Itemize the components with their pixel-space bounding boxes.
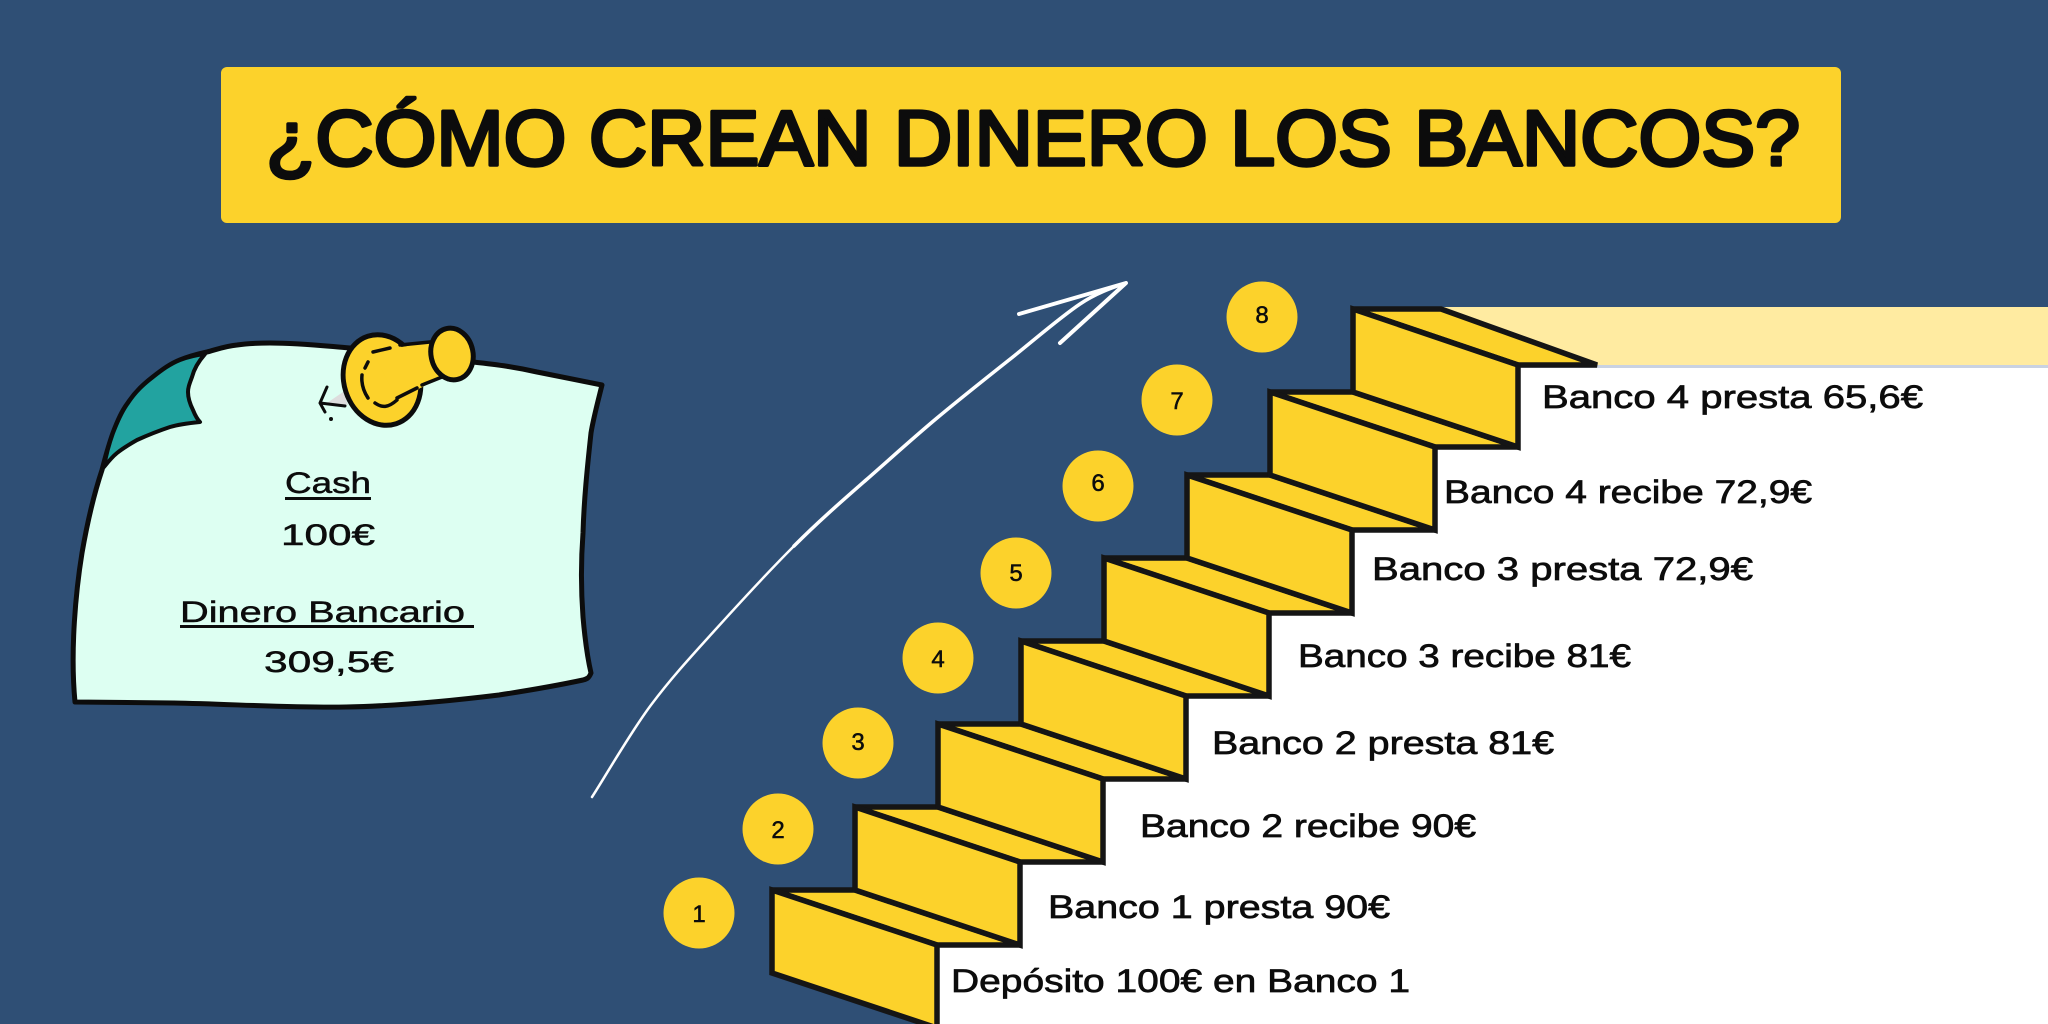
badge 7: [1142, 364, 1212, 436]
step 1: [772, 890, 1020, 1024]
curled corner: [104, 354, 205, 467]
step 4: [1021, 641, 1269, 779]
badge 1: [664, 878, 734, 948]
badge 5: [980, 538, 1052, 608]
cash value: 100€: [281, 519, 375, 552]
title banner: [221, 67, 1841, 223]
note paper panel: [73, 324, 602, 707]
badge 6: 6: [1091, 470, 1105, 497]
white floor area under stairs: [937, 368, 2048, 1024]
badge 1: 1: [692, 901, 706, 928]
step 2: [855, 807, 1103, 945]
badge 8: 8: [1255, 302, 1269, 329]
paper sheet: [73, 343, 602, 707]
label step 8: Banco 4 presta 65,6€: [1542, 379, 1923, 415]
title banner: ¿CÓMO CREAN DINERO LOS BANCOS?: [266, 94, 1800, 182]
step 7: [1270, 392, 1518, 530]
top landing band: [1441, 307, 2048, 368]
badge 3: 3: [851, 729, 865, 756]
label step 7: Banco 4 recibe 72,9€: [1444, 474, 1812, 510]
label step 4: Banco 2 presta 81€: [1212, 725, 1554, 761]
step 3: [938, 724, 1186, 862]
step number badges: [664, 282, 1298, 948]
badge 5: 5: [1009, 560, 1023, 587]
label step 3: Banco 2 recibe 90€: [1140, 808, 1476, 844]
badge 4: 4: [931, 646, 945, 673]
icon: push pin: [320, 324, 478, 435]
badge 7: 7: [1170, 388, 1184, 415]
label step 1: Depósito 100€ en Banco 1: [951, 963, 1410, 999]
bank money value: 309,5€: [264, 646, 394, 679]
arrow rising along the stairs: [592, 283, 1126, 797]
step labels: [951, 379, 1923, 999]
cash heading: Cash: [285, 467, 371, 500]
badge 3: [822, 708, 894, 778]
badge 2: 2: [771, 817, 785, 844]
step 6: [1187, 475, 1435, 613]
label step 2: Banco 1 presta 90€: [1048, 889, 1390, 925]
bank money heading: Dinero Bancario: [180, 596, 465, 629]
staircase: [772, 309, 1597, 1024]
step 8: [1353, 309, 1597, 447]
badge 8: [1226, 282, 1298, 352]
badge 4: [902, 622, 974, 694]
label step 6: Banco 3 presta 72,9€: [1372, 551, 1753, 587]
step 5: [1104, 558, 1352, 696]
label step 5: Banco 3 recibe 81€: [1298, 638, 1631, 674]
badge 2: [742, 794, 814, 864]
badge 6: [1062, 450, 1134, 522]
